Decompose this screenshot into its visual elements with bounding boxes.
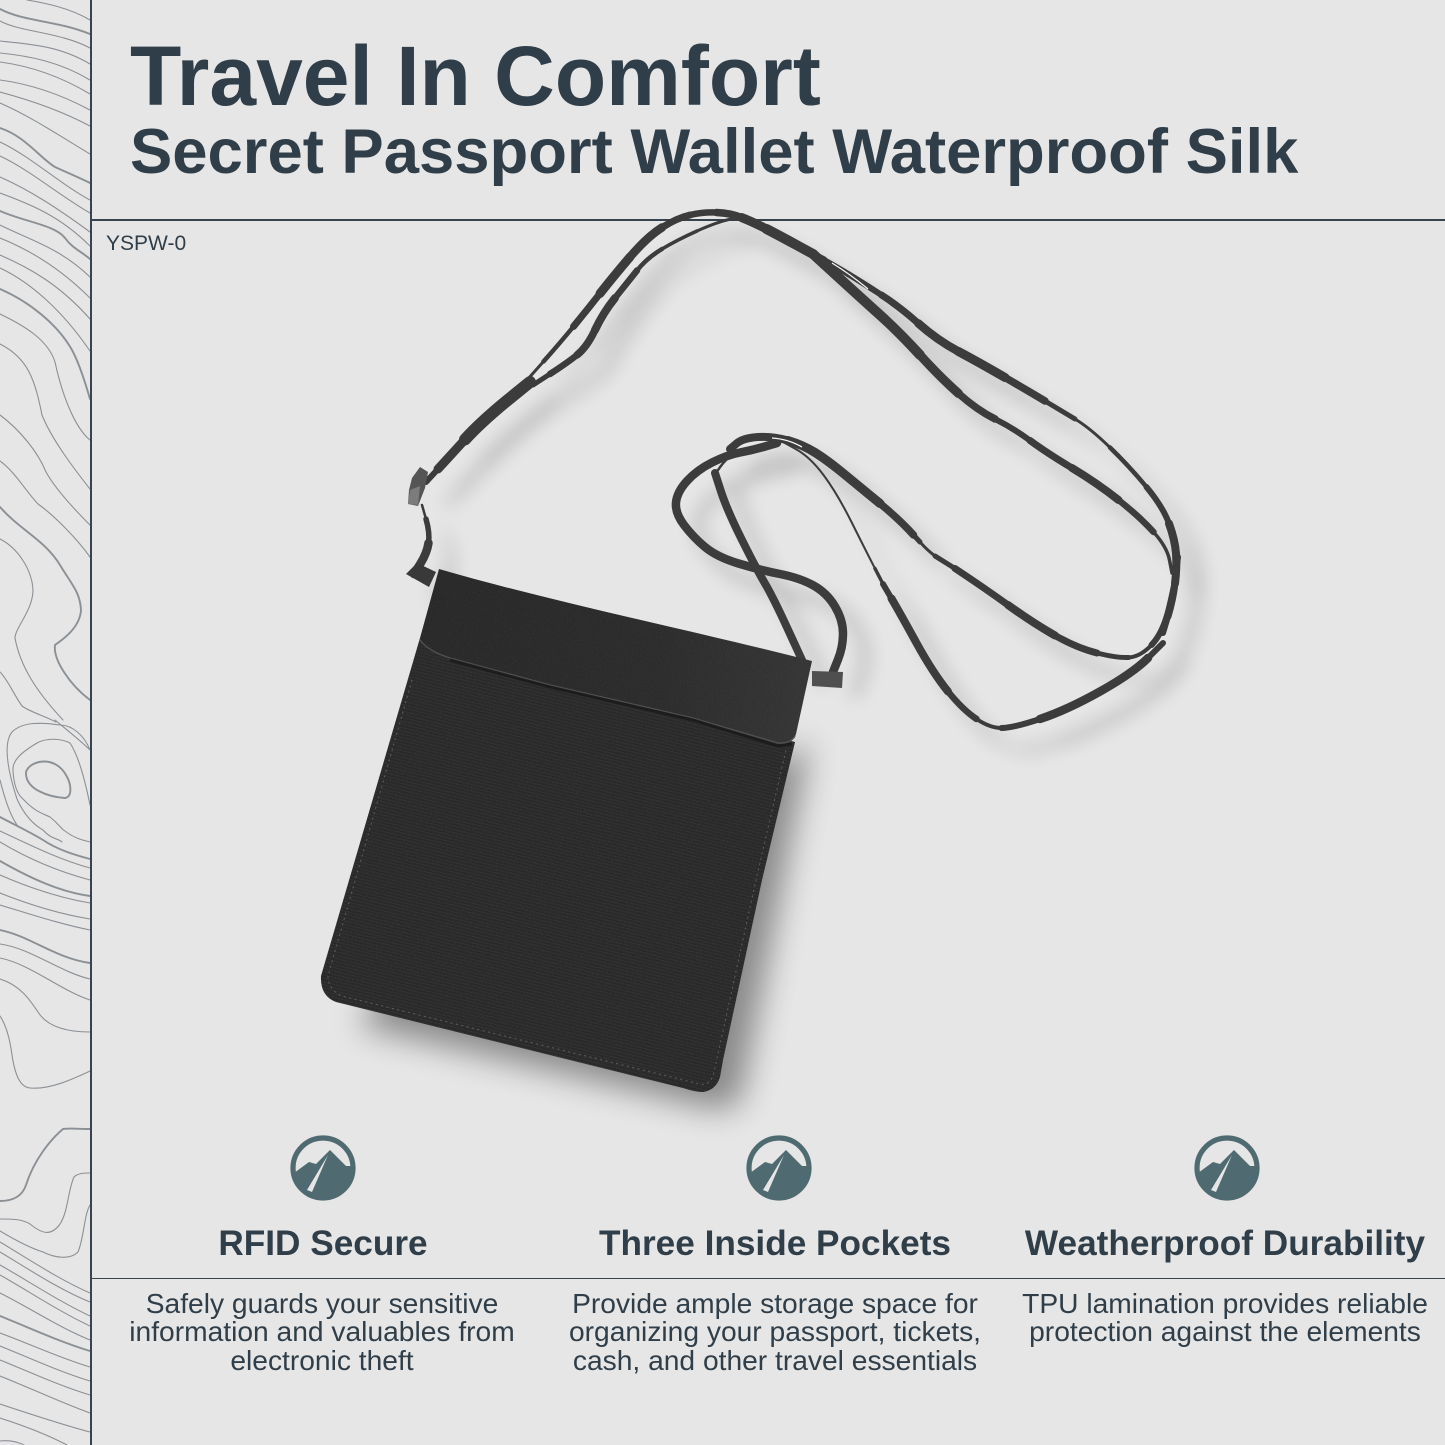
icon: mountain badge [1194, 1135, 1260, 1201]
features divider line [92, 1278, 1445, 1279]
strap slider buckle [408, 467, 428, 506]
feature: RFID Secure [290, 1135, 356, 1201]
text: Weatherproof Durability description: TPU lamination provides reliable [1022, 1287, 1428, 1319]
strap and bag shadows [359, 234, 1200, 1109]
subtitle: Secret Passport Wallet Waterproof Silk [130, 117, 1298, 187]
title: Travel In Comfort [130, 29, 821, 123]
icon: mountain badge [290, 1135, 356, 1201]
heading: RFID Secure: RFID Secure [218, 1224, 428, 1263]
product code: YSPW-0 [106, 232, 186, 255]
right strap tab [812, 671, 843, 688]
feature: Weatherproof Durability [1194, 1135, 1260, 1201]
feature: Three Inside Pockets [746, 1135, 812, 1201]
text: Three Inside Pockets description: organizing your passport, tickets, [569, 1315, 981, 1347]
text: Weatherproof Durability description [1022, 1287, 1428, 1347]
text: Weatherproof Durability description: protection against the elements [1029, 1315, 1421, 1347]
text: RFID Secure description [129, 1287, 515, 1376]
text: Three Inside Pockets description [569, 1287, 981, 1376]
left strap tab [406, 563, 436, 587]
left vertical rule [90, 0, 92, 1445]
heading: Three Inside Pockets: Three Inside Pockets [599, 1224, 951, 1263]
text: Three Inside Pockets description: Provide ample storage space for [572, 1287, 978, 1319]
text: RFID Secure description: electronic theft [230, 1344, 414, 1376]
wallet flap [420, 569, 812, 744]
header divider line [92, 219, 1445, 221]
icon: mountain badge [746, 1135, 812, 1201]
text: RFID Secure description: information and valuables from [129, 1315, 515, 1347]
text: Three Inside Pockets description: cash, and other travel essentials [573, 1344, 977, 1376]
neck strap [406, 212, 1178, 728]
topographic side panel [0, 0, 90, 1445]
text: RFID Secure description: Safely guards your sensitive [146, 1287, 498, 1319]
wallet body [321, 569, 812, 1092]
heading: Weatherproof Durability: Weatherproof Durability [1025, 1224, 1425, 1263]
